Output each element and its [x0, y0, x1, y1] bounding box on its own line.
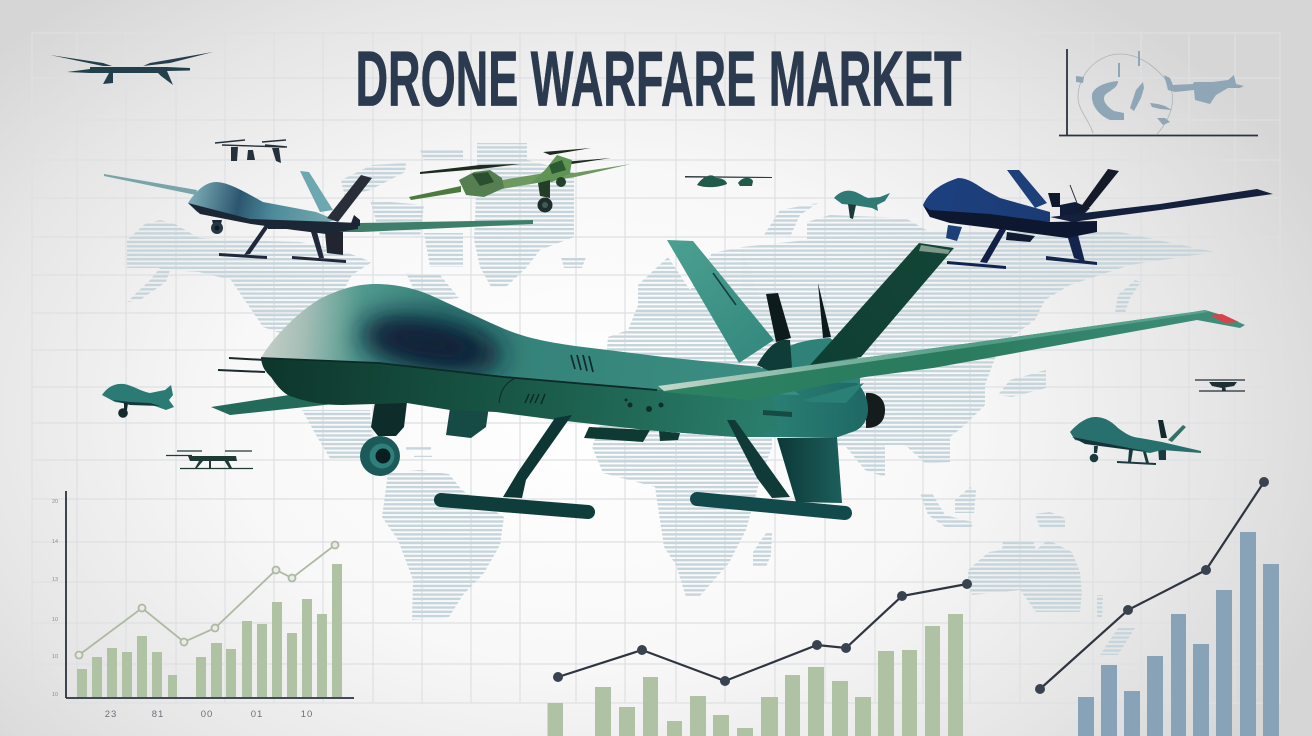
- left chart: y-axis labels: [52, 499, 58, 698]
- inset map chart top right: [1059, 49, 1258, 136]
- main drone: [211, 240, 1245, 513]
- main drone: sensor dots: [624, 398, 664, 412]
- main drone: fin tip: [919, 245, 950, 254]
- main drone: upper vents: [571, 355, 593, 372]
- left chart: x-axis labels: 23: [105, 709, 117, 720]
- drone: small helicopter centre: [685, 175, 772, 187]
- drone: small teal plane centre: [834, 191, 890, 219]
- map: Africa: [592, 420, 772, 597]
- main drone: wing leading edge: [658, 310, 1208, 391]
- main drone: payload pods: [584, 427, 680, 442]
- main drone: intake shadow: [757, 340, 792, 372]
- centre chart: trend line: [553, 579, 972, 686]
- left chart: y-axis labels: 10: [52, 692, 58, 698]
- right chart: trend line: [1035, 477, 1269, 694]
- left bar and line chart: [52, 491, 354, 720]
- map: Indonesia: [920, 487, 1065, 528]
- main drone: nose sensors: [218, 358, 265, 372]
- map: South America: [382, 470, 504, 620]
- map: Europe: [605, 247, 760, 400]
- left chart: y-axis labels: 20: [52, 499, 58, 505]
- left chart: y-axis labels: 10: [52, 617, 58, 623]
- right bar and line chart: [1035, 477, 1279, 736]
- main drone: wing root fairing: [803, 383, 864, 403]
- map: Central America: [302, 410, 372, 460]
- map: Asia: [740, 215, 1215, 477]
- main drone: belly seam: [261, 358, 657, 390]
- map: Madagascar: [753, 533, 772, 567]
- main drone: red wing tip: [1209, 314, 1239, 323]
- main drone: door seam: [499, 378, 516, 403]
- left chart: trend line: [76, 542, 338, 658]
- main drone: engine hub: [755, 338, 860, 400]
- left chart: x-axis labels: 01: [251, 709, 263, 720]
- map: Japan: [1115, 280, 1141, 313]
- drone: small teal plane left: [102, 384, 174, 418]
- main drone: rear nozzle: [866, 393, 885, 428]
- left chart: x-axis labels: 00: [201, 709, 213, 720]
- map: Caribbean fragments: [406, 447, 432, 457]
- map: fragment north Asia: [764, 203, 818, 237]
- left chart: y-axis labels: 13: [52, 577, 58, 583]
- drone: small quadcopter right: [1195, 380, 1245, 391]
- main drone: lower vents: [525, 394, 545, 404]
- right chart: bars: [1078, 532, 1279, 736]
- centre chart: bars: [548, 614, 963, 736]
- map: Australia: [968, 540, 1082, 612]
- map: Alaska and western North America: [127, 220, 372, 340]
- main drone: nose gear: [371, 402, 407, 436]
- main drone: right skid: [697, 420, 845, 513]
- drone: pale teal reaper upper left: [104, 171, 533, 263]
- main drone: left elevator: [211, 395, 343, 415]
- main drone: rear slot: [763, 410, 792, 417]
- drone: small quadcopter top: [215, 140, 287, 163]
- main drone: right tail fin: [810, 243, 954, 365]
- main drone: rear blade and antenna: [766, 283, 831, 342]
- map: east coast fragments: [998, 370, 1046, 397]
- drone: navy reaper upper right: [923, 169, 1273, 269]
- drone: green twin-rotor upper centre: [409, 148, 631, 212]
- main drone: left skid: [441, 415, 588, 512]
- left chart: x-axis labels: [105, 709, 313, 720]
- main drone: lower tail fin: [777, 437, 842, 503]
- main drone: right wing: [658, 310, 1245, 400]
- main drone: nose wheel: [360, 436, 400, 476]
- main drone: fuselage top: [261, 284, 800, 395]
- main drone: fuselage belly: [261, 358, 778, 437]
- drone: top-left silhouette: [50, 52, 213, 85]
- drone: small teal reaper right: [1070, 417, 1201, 465]
- left chart: y-axis labels: 10: [52, 654, 58, 660]
- map: Greenland: [474, 143, 574, 287]
- main drone: left tail fin: [667, 240, 774, 363]
- main drone: ventral fairing: [446, 406, 489, 438]
- striped world map: [127, 143, 1215, 655]
- map: north Atlantic islands: [406, 233, 586, 302]
- left chart: axes: [66, 491, 354, 698]
- main drone: fin slot: [713, 273, 736, 305]
- left chart: x-axis labels: 10: [301, 709, 313, 720]
- drone: small quadcopter left: [166, 451, 253, 468]
- left chart: x-axis labels: 81: [152, 709, 164, 720]
- map: Pacific island fragments: [1097, 595, 1135, 655]
- left chart: y-axis labels: 14: [52, 539, 58, 545]
- left chart: bars: [77, 564, 342, 697]
- map: arctic islands: [341, 150, 463, 237]
- main drone: rear body: [646, 380, 868, 437]
- centre bar and line chart: [548, 579, 972, 736]
